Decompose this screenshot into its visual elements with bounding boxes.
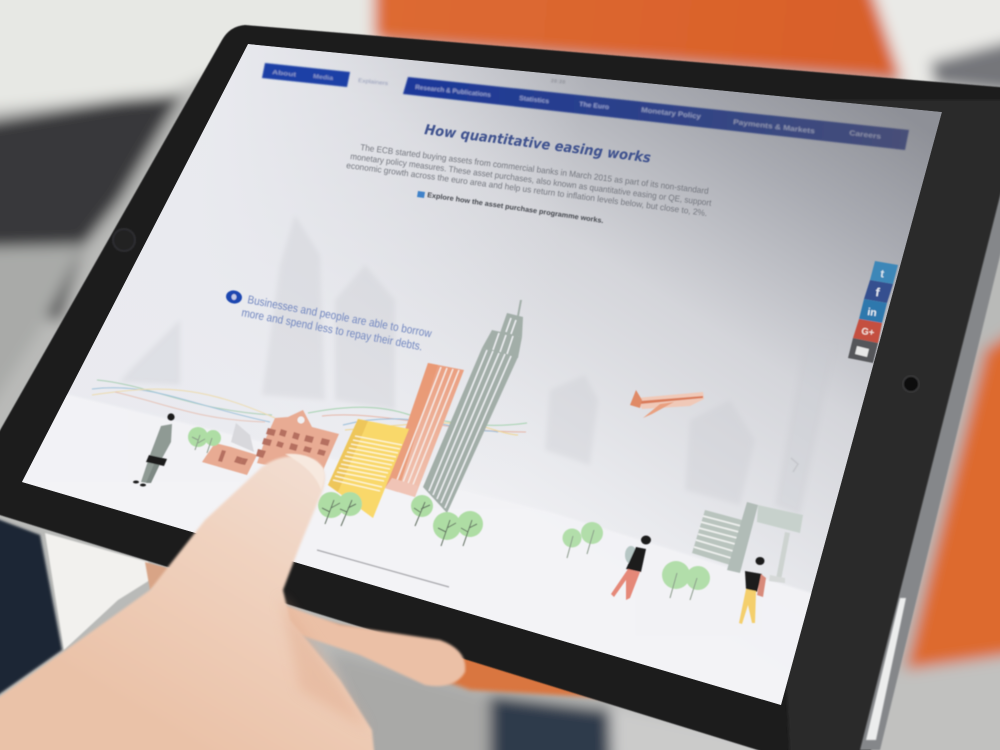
tree group: by the yellow tower [318,492,362,526]
yellow tower [328,419,409,518]
dark chair left [0,95,182,248]
shirt sleeve [0,518,62,697]
orange chair right [905,320,1000,672]
thumb [270,600,465,686]
tree group: lower centre [562,522,603,558]
main navigation bar: The Euro [579,101,609,111]
tree group: right [662,561,710,600]
salmon tower [385,363,464,497]
white cuff [45,533,150,650]
language and site pill [262,63,350,87]
flowing lines right [308,407,527,435]
social share buttons [848,261,898,363]
main navigation bar: Statistics [519,95,550,105]
orange chair top [374,0,902,80]
home sensor [903,376,919,392]
caption with bullet: more and spend less to repay their debts. [240,307,423,353]
walking person with backpack [611,536,651,600]
main navigation bar: Monetary Policy [641,107,701,121]
floor under the tablet [330,650,490,750]
businessman [133,413,175,486]
facebook button: f [875,285,881,300]
google plus button: G+ [861,326,875,339]
silver edge [860,188,1000,750]
language and site pill: About [272,70,296,78]
tree group: by the man [188,427,221,453]
palm and pointing finger [0,456,375,750]
twitter button: t [880,268,885,281]
explore checkbox line: Explore how the asset purchase programme works. [427,192,604,225]
top navigation [262,63,909,150]
hand [0,454,465,750]
search label: Explainers [358,78,389,87]
main navigation bar: Careers [849,130,881,141]
fingernail [285,454,324,490]
intro paragraph: economic growth across the euro area and help us return to inflation levels below, but close to, 2%. [346,160,708,218]
main navigation bar: Payments & Markets [733,119,815,135]
ground [22,393,812,705]
walking person with bag [739,557,766,624]
intro paragraph: monetary policy measures. These asset purchases, also known as quantitative easing or QE, support [350,151,713,208]
tree group: centre [433,511,483,546]
mail button [848,338,878,363]
main navigation bar: Research & Publications [415,84,491,99]
airplane [630,390,704,418]
orange strip under the tablet [320,622,650,700]
front camera [113,229,135,251]
caption with bullet [225,289,433,353]
intro paragraph: The ECB started buying assets from commercial banks in March 2015 as part of its non-standard [360,142,709,196]
skyscraper [423,300,523,513]
next chevron [791,458,798,472]
trees [188,427,710,600]
date and time: 20:20 [551,78,566,85]
linkedin button: in [867,306,878,319]
progress line [317,550,449,587]
tree: by the skyscraper [411,495,433,526]
main navigation bar [403,77,909,150]
fingers behind tablet [145,562,175,590]
knuckle shading [280,595,368,730]
ghost city skyline [125,224,796,508]
language and site pill: Media [313,74,334,82]
brick school building [202,410,339,477]
caption with bullet: Businesses and people are able to borrow [246,294,433,340]
low grey building [692,502,803,583]
title: How quantitative easing works [423,122,652,167]
flowing lines left [92,380,275,422]
